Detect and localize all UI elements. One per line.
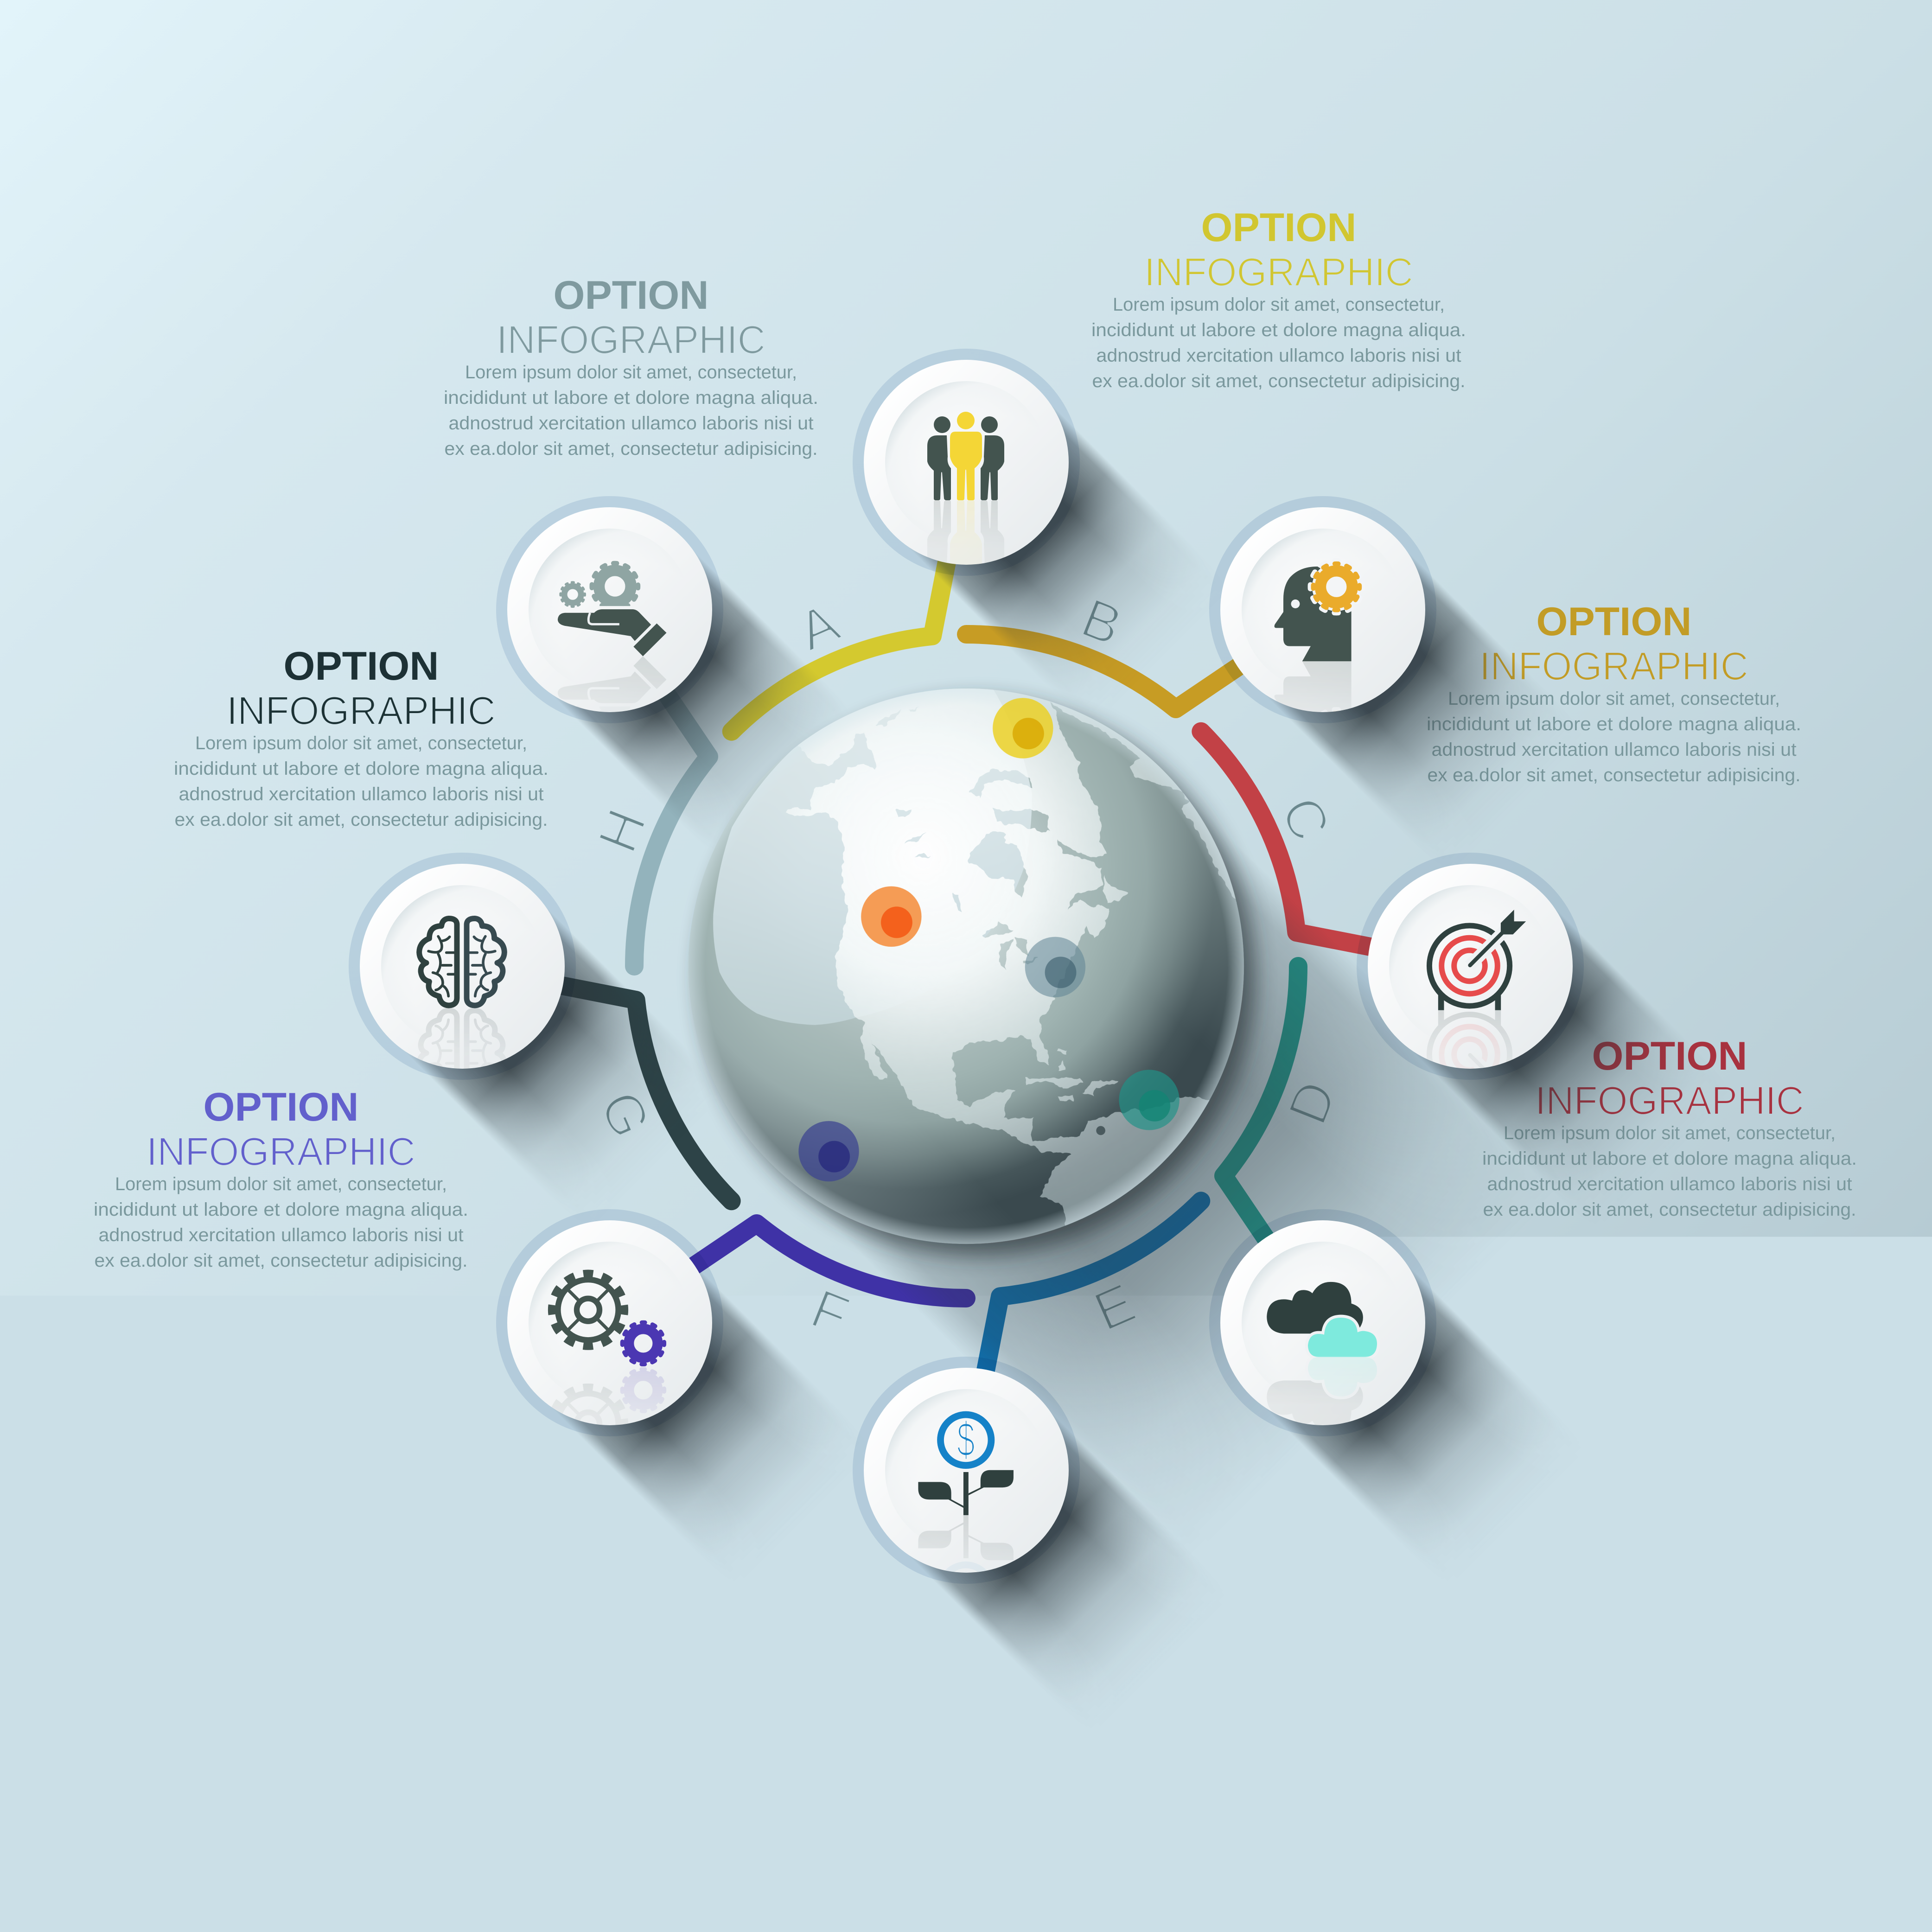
icon: money plant: $ <box>957 1413 975 1467</box>
node A: people <box>853 349 1080 589</box>
text block: option yellow: adnostrud xercitation ullamco laboris nisi ut <box>1097 345 1461 366</box>
text block: option yellow: Lorem ipsum dolor sit amet, consectetur, <box>1113 294 1445 315</box>
ring letters A to H: D <box>1276 1072 1348 1133</box>
banner subtitle: elements: ELEMENTS <box>869 1840 1031 1881</box>
text block: option teal: Lorem ipsum dolor sit amet, consectetur, <box>1289 1526 1621 1547</box>
map marker: orange <box>861 886 922 947</box>
node C: target <box>1357 853 1584 1111</box>
ring letters A to H <box>586 587 1348 1347</box>
icon reflection: clouds <box>1267 1357 1377 1432</box>
text block: option purple: ex ea.dolor sit amet, consectetur adipisicing. <box>95 1250 467 1271</box>
text block: option teal: OPTION <box>1377 1437 1533 1482</box>
icon reflection: target <box>1429 1010 1526 1111</box>
icon reflection: money plant <box>918 1515 1014 1618</box>
text block: option blue: ex ea.dolor sit amet, consectetur adipisicing. <box>572 1696 946 1716</box>
text block: option teal: INFOGRAPHIC <box>1320 1482 1589 1526</box>
icon: hand with gears <box>558 563 667 656</box>
banner title: infographic: INFOGRAPHIC <box>806 1783 1090 1830</box>
text block: option purple: adnostrud xercitation ullamco laboris nisi ut <box>99 1225 463 1245</box>
map marker: slate <box>1025 937 1085 997</box>
text block: option gold: adnostrud xercitation ullamco laboris nisi ut <box>1432 740 1796 760</box>
text block: option red: adnostrud xercitation ullamco laboris nisi ut <box>1487 1174 1852 1194</box>
icon: people <box>927 412 1004 500</box>
text block: option gold: ex ea.dolor sit amet, consectetur adipisicing. <box>1427 765 1801 785</box>
icon: money plant <box>918 1413 1014 1515</box>
text block: option gold: OPTION <box>1537 599 1691 644</box>
text block: option gold: Lorem ipsum dolor sit amet, consectetur, <box>1448 689 1780 709</box>
node F: gears <box>496 1209 723 1460</box>
icon reflection: people <box>927 500 1004 589</box>
text block: option dark: incididunt ut labore et dolore magna aliqua. <box>174 759 548 779</box>
text block: option yellow <box>1091 205 1466 391</box>
map marker: navy <box>798 1121 859 1181</box>
text block: option blue: incididunt ut labore et dolore magna aliqua. <box>572 1645 946 1665</box>
text block: option purple: Lorem ipsum dolor sit amet, consectetur, <box>115 1174 447 1194</box>
text block: option gray: Lorem ipsum dolor sit amet, consectetur, <box>465 362 797 383</box>
text block: option yellow: incididunt ut labore et dolore magna aliqua. <box>1091 320 1466 340</box>
text block: option purple <box>94 1085 468 1271</box>
ring letters A to H: B <box>1073 587 1130 658</box>
text block: option red: INFOGRAPHIC <box>1535 1079 1804 1123</box>
text block: option dark <box>174 644 548 830</box>
text block: option purple: INFOGRAPHIC <box>147 1130 415 1174</box>
icon: target with arrow <box>1429 910 1526 1010</box>
text block: option dark: OPTION <box>284 644 439 689</box>
node B: head with gear <box>1209 496 1436 762</box>
text block: option teal: incididunt ut labore et dolore magna aliqua. <box>1268 1552 1642 1572</box>
text block: option gold: incididunt ut labore et dolore magna aliqua. <box>1427 714 1801 734</box>
ring letters A to H: C <box>1269 788 1342 849</box>
map marker: yellow <box>993 698 1053 759</box>
text block: option gold: INFOGRAPHIC <box>1479 644 1748 689</box>
node D: clouds <box>1209 1209 1436 1436</box>
continents <box>773 657 1270 1227</box>
icon: clouds <box>1267 1282 1377 1357</box>
text block: option teal: adnostrud xercitation ullamco laboris nisi ut <box>1273 1577 1637 1598</box>
text block: option purple: incididunt ut labore et dolore magna aliqua. <box>94 1199 468 1220</box>
node shadows <box>391 391 1738 1738</box>
bottom banner <box>417 1761 1511 1932</box>
text block: option dark: Lorem ipsum dolor sit amet, consectetur, <box>195 733 527 753</box>
text block: option dark: adnostrud xercitation ullamco laboris nisi ut <box>179 784 543 804</box>
text block: option gray: INFOGRAPHIC <box>497 318 765 362</box>
segmented ring with connector stems <box>462 462 1470 1470</box>
ring letters A to H: E <box>1085 1271 1144 1343</box>
text block: option red: incididunt ut labore et dolore magna aliqua. <box>1482 1148 1857 1169</box>
text block: option yellow: OPTION <box>1201 205 1357 250</box>
text block: option red: ex ea.dolor sit amet, consectetur adipisicing. <box>1483 1199 1856 1220</box>
text block: option teal <box>1268 1437 1642 1623</box>
icon: brain <box>419 918 504 1006</box>
ring letters A to H: F <box>803 1277 857 1347</box>
text block: option yellow: ex ea.dolor sit amet, consectetur adipisicing. <box>1092 371 1465 391</box>
text block: option dark: ex ea.dolor sit amet, consectetur adipisicing. <box>174 810 548 830</box>
text block: option blue: Lorem ipsum dolor sit amet, consectetur, <box>593 1619 925 1639</box>
text block: option red <box>1482 1034 1857 1220</box>
icon reflection: brain <box>419 1010 504 1097</box>
node H: hand with gears <box>496 496 723 749</box>
text block: option blue <box>572 1530 946 1716</box>
text block: option blue: adnostrud xercitation ullamco laboris nisi ut <box>577 1670 941 1690</box>
text block: option gray: OPTION <box>554 273 708 318</box>
text block: option teal: ex ea.dolor sit amet, consectetur adipisicing. <box>1269 1603 1641 1623</box>
globe contact shadow <box>699 699 1256 1256</box>
icon: gears <box>552 1274 664 1365</box>
text block: option blue: OPTION <box>682 1530 836 1575</box>
icon reflection: hand <box>558 656 667 749</box>
ring letters A to H: A <box>789 591 848 663</box>
ring letters A to H: H <box>586 801 658 861</box>
text block: option red: Lorem ipsum dolor sit amet, consectetur, <box>1504 1123 1836 1143</box>
icon: head with gear <box>1275 561 1363 661</box>
colour bar <box>802 1831 1093 1840</box>
text block: option purple: OPTION <box>203 1085 359 1129</box>
text block: option gray: incididunt ut labore et dolore magna aliqua. <box>444 388 818 408</box>
icon reflection: head <box>1275 661 1363 762</box>
globe long shadow <box>831 830 1488 1488</box>
text block: option gray: ex ea.dolor sit amet, consectetur adipisicing. <box>444 439 818 459</box>
node E: money plant <box>853 1357 1080 1618</box>
text block: option blue: INFOGRAPHIC <box>625 1575 893 1619</box>
text block: option dark: INFOGRAPHIC <box>227 689 496 733</box>
glass reflection lens <box>713 689 1032 1025</box>
node G: brain <box>349 853 576 1097</box>
text block: option gray: adnostrud xercitation ullamco laboris nisi ut <box>449 413 813 434</box>
text block: option red: OPTION <box>1592 1034 1747 1078</box>
text block: option yellow: INFOGRAPHIC <box>1144 250 1413 294</box>
text block: option gray <box>444 273 818 459</box>
text block: option gold <box>1427 599 1801 785</box>
map marker: teal <box>1119 1070 1180 1130</box>
icon reflection: gears <box>552 1369 664 1460</box>
ring letters A to H: G <box>588 1082 663 1147</box>
globe <box>686 657 1270 1245</box>
